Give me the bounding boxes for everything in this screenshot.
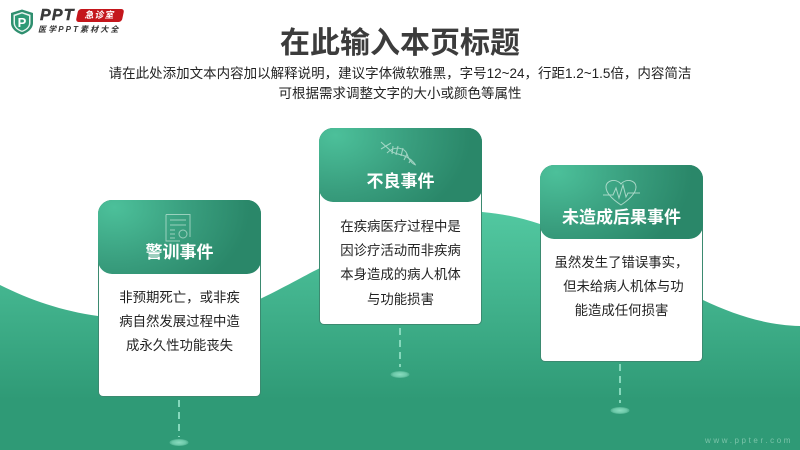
- logo: [11, 7, 124, 34]
- card 3 text: 虽然发生了错误事实，: [555, 255, 688, 270]
- card 1 text: 成永久性功能丧失: [126, 338, 233, 353]
- connector pin 1: [170, 400, 188, 446]
- subtitle: 可根据需求调整文字的大小或颜色等属性: [278, 86, 522, 101]
- icon: shield logo: [11, 10, 33, 34]
- subtitle: 请在此处添加文本内容加以解释说明，建议字体微软雅黑，字号12~24，行距1.2~1.5倍，内容简洁: [109, 66, 691, 81]
- icon: shield logo: P: [18, 15, 27, 30]
- subtitle: [109, 66, 691, 101]
- logo red badge: [76, 9, 124, 22]
- panel: card 3: [540, 165, 703, 362]
- card 3 header: [540, 165, 703, 239]
- logo wordmark: PPT: [40, 7, 75, 24]
- card 2 text: [340, 219, 461, 307]
- connector pin 3: [610, 364, 630, 414]
- card 1 text: 病自然发展过程中造: [119, 314, 240, 329]
- card 2 text: 本身造成的病人机体: [340, 267, 461, 282]
- title: 在此输入本页标题: [280, 27, 520, 60]
- logo red badge: 急诊室: [84, 10, 116, 20]
- card 2 text: 因诊疗活动而非疾病: [340, 243, 461, 258]
- card 1 text: 非预期死亡，或非疾: [119, 290, 240, 305]
- card 3 text: 能造成任何损害: [575, 303, 668, 318]
- logo subtitle: 医学PPT素材大全: [38, 25, 120, 34]
- panel: card 2: [319, 128, 482, 325]
- card 2 header: [319, 128, 482, 202]
- card 3 title: 未造成后果事件: [562, 208, 681, 227]
- panel: card 1: [98, 200, 261, 397]
- card 1 text: [119, 290, 240, 353]
- icon: heart pulse: [603, 180, 640, 206]
- website watermark: www.ppter.com: [705, 436, 793, 445]
- icon: dna: [380, 142, 416, 166]
- card 3 text: 但未给病人机体与功: [563, 279, 684, 294]
- card 1 title: 警训事件: [146, 243, 214, 262]
- icon: document: [166, 214, 190, 242]
- card 3 text: [555, 255, 688, 318]
- card 1 header: [98, 200, 261, 274]
- card 2 text: 与功能损害: [367, 292, 434, 307]
- card 2 title: 不良事件: [366, 172, 434, 191]
- connector pin 2: [390, 328, 410, 378]
- card 2 text: 在疾病医疗过程中是: [340, 219, 461, 234]
